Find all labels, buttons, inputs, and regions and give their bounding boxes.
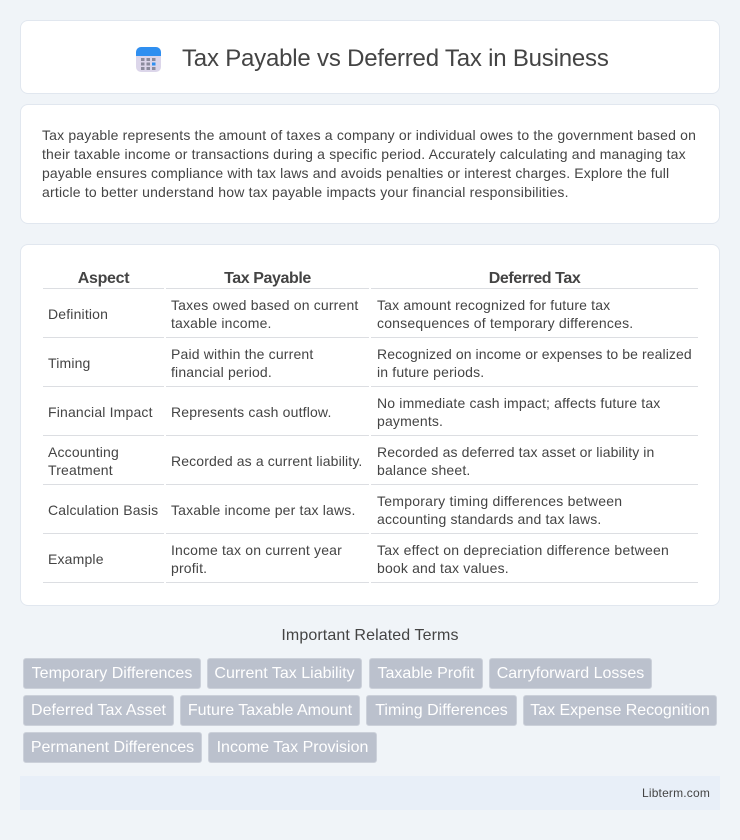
row: definition: consequences of temporary differences.	[377, 315, 633, 331]
tag: Income Tax Provision	[217, 739, 368, 756]
table	[43, 270, 698, 583]
row: accounting treatment: Recorded as a current liability.	[171, 453, 362, 469]
tag: Timing Differences	[375, 702, 508, 719]
row: accounting treatment	[48, 444, 654, 478]
row: definition: Taxes owed based on current	[171, 297, 358, 313]
intro paragraph: payable ensures compliance with tax laws and avoids penalties or interest charges. Explore the full	[42, 165, 669, 181]
tag: Current Tax Liability	[214, 665, 355, 682]
row: financial impact: Financial Impact	[48, 404, 153, 420]
tag: Carryforward Losses	[497, 665, 644, 682]
row: financial impact: No immediate cash impact; affects future tax	[377, 395, 660, 411]
row: financial impact: payments.	[377, 413, 443, 429]
row: calculation basis: accounting standards and tax laws.	[377, 511, 601, 527]
row: accounting treatment: balance sheet.	[377, 462, 470, 478]
row: definition: Definition	[48, 306, 108, 322]
row: calculation basis: Calculation Basis	[48, 502, 158, 518]
tag	[489, 658, 652, 689]
row: timing: in future periods.	[377, 364, 484, 380]
row: timing: Recognized on income or expenses to be realized	[377, 346, 692, 362]
row: timing	[48, 346, 692, 380]
row: definition: Tax amount recognized for future tax	[377, 297, 610, 313]
footer credit: Libterm.com	[642, 786, 710, 800]
intro paragraph: their taxable income or transactions during a specific period. Accurately calculating and managing tax	[42, 146, 686, 162]
row: accounting treatment: Accounting	[48, 444, 119, 460]
table header: Deferred Tax	[489, 270, 580, 287]
tag	[23, 695, 174, 726]
row: calculation basis	[48, 493, 622, 527]
tag	[180, 695, 360, 726]
tag	[366, 695, 517, 726]
tag	[369, 658, 483, 689]
tag: Temporary Differences	[32, 665, 192, 682]
tag: Tax Expense Recognition	[530, 702, 710, 719]
tag: Future Taxable Amount	[188, 702, 352, 719]
title: Tax Payable vs Deferred Tax in Business	[182, 45, 609, 72]
table header: Aspect	[78, 270, 129, 287]
intro paragraph	[42, 127, 696, 200]
related terms tags	[23, 658, 717, 763]
tag: Deferred Tax Asset	[31, 702, 166, 719]
footer bar	[20, 776, 720, 810]
row: financial impact: Represents cash outflow.	[171, 404, 332, 420]
tag: Permanent Differences	[31, 739, 194, 756]
row: timing: Timing	[48, 355, 91, 371]
row: accounting treatment: Recorded as deferred tax asset or liability in	[377, 444, 654, 460]
tag	[207, 658, 362, 689]
tag	[23, 732, 202, 763]
row: example: book and tax values.	[377, 560, 509, 576]
table header	[78, 270, 581, 287]
row: accounting treatment: Treatment	[48, 462, 113, 478]
row: calculation basis: Taxable income per tax laws.	[171, 502, 356, 518]
row: definition	[48, 297, 633, 331]
icon: calendar	[136, 47, 161, 72]
row: example: Income tax on current year	[171, 542, 342, 558]
intro text panel	[20, 104, 720, 224]
tag: Taxable Profit	[378, 665, 474, 682]
row: timing: financial period.	[171, 364, 272, 380]
row: timing: Paid within the current	[171, 346, 313, 362]
table header: Tax Payable	[224, 270, 311, 287]
row: example	[48, 542, 669, 576]
row: example: profit.	[171, 560, 207, 576]
row: calculation basis: Temporary timing differences between	[377, 493, 622, 509]
header panel	[20, 20, 720, 94]
tag	[23, 658, 201, 689]
row: definition: taxable income.	[171, 315, 272, 331]
tag	[208, 732, 377, 763]
intro paragraph: Tax payable represents the amount of taxes a company or individual owes to the government based on	[42, 127, 696, 143]
related terms heading: Important Related Terms	[281, 627, 459, 644]
comparison table panel	[20, 244, 720, 606]
row: example: Tax effect on depreciation difference between	[377, 542, 669, 558]
row: example: Example	[48, 551, 104, 567]
intro paragraph: article to better understand how tax payable impacts your financial responsibilities.	[42, 184, 569, 200]
row: financial impact	[48, 395, 660, 429]
tag	[523, 695, 717, 726]
